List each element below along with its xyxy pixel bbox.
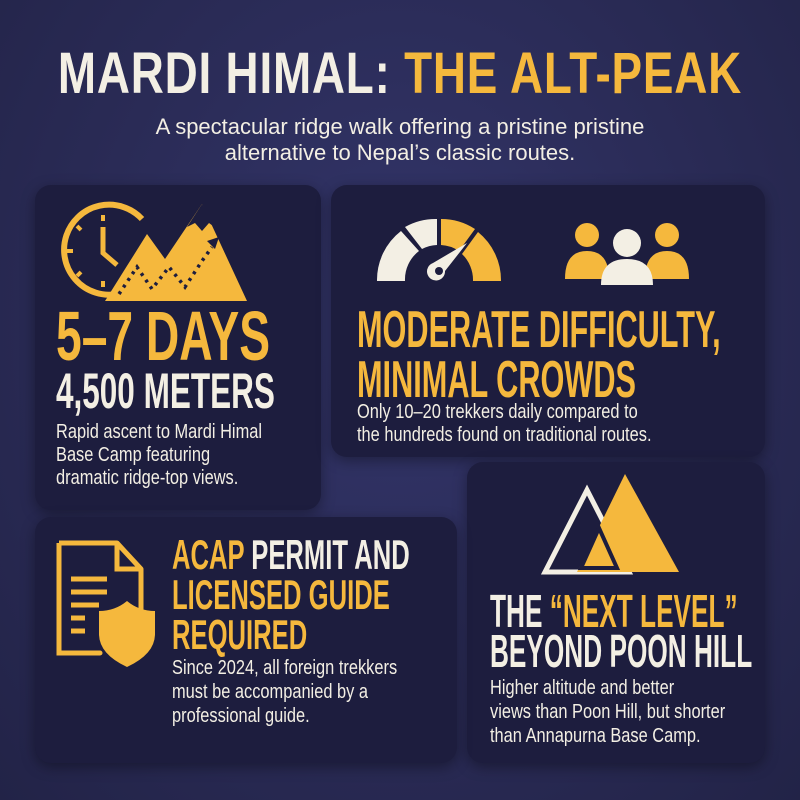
subtitle: alternative to Nepal’s classic routes.	[225, 140, 575, 165]
title: MARDI HIMAL: THE ALT-PEAK	[58, 41, 742, 106]
text: duration description: Base Camp featuring	[56, 444, 210, 466]
text: permit description	[172, 657, 397, 727]
text: next level description	[490, 677, 725, 747]
panel: duration	[35, 185, 321, 510]
icon: triangles	[541, 474, 679, 574]
panel: permit	[35, 517, 457, 763]
heading: next level	[490, 585, 752, 677]
icon: clock and mountain	[61, 202, 247, 301]
heading: permit required: REQUIRED	[172, 611, 307, 658]
heading: moderate difficulty: MINIMAL CROWDS	[357, 351, 636, 409]
text: next level description: Higher altitude and better	[490, 677, 674, 699]
heading: 5-7 days: 5–7 DAYS	[56, 297, 270, 375]
text: crowds description: the hundreds found on traditional routes.	[357, 424, 651, 446]
icon: document with shield	[56, 540, 155, 667]
heading: permit required: ACAP PERMIT AND	[172, 531, 410, 578]
subtitle	[156, 114, 644, 165]
text: duration description: Rapid ascent to Mardi Himal	[56, 421, 262, 443]
text: next level description: views than Poon Hill, but shorter	[490, 701, 725, 723]
subtitle: A spectacular ridge walk offering a pristine pristine	[156, 114, 644, 139]
icon: people	[565, 223, 689, 285]
text: permit description: Since 2024, all foreign trekkers	[172, 657, 397, 679]
heading: moderate difficulty: MODERATE DIFFICULTY,	[357, 301, 721, 359]
text: crowds description: Only 10–20 trekkers daily compared to	[357, 401, 638, 423]
icon: gauge	[377, 219, 501, 281]
text: permit description: professional guide.	[172, 705, 310, 727]
text: duration description: dramatic ridge-top views.	[56, 467, 238, 489]
heading: next level: THE “NEXT LEVEL”	[490, 585, 738, 637]
heading: permit required	[172, 531, 410, 658]
heading: permit required: LICENSED GUIDE	[172, 571, 390, 618]
text: permit description: must be accompanied by a	[172, 681, 368, 703]
heading: next level: BEYOND POON HILL	[490, 625, 752, 677]
text: duration description	[56, 421, 262, 489]
heading: altitude: 4,500 METERS	[56, 363, 275, 419]
text: next level description: than Annapurna Base Camp.	[490, 725, 701, 747]
panel: next level	[467, 462, 765, 763]
text: crowds description	[357, 401, 651, 446]
heading: moderate difficulty	[357, 301, 721, 409]
panel: difficulty	[331, 185, 765, 457]
